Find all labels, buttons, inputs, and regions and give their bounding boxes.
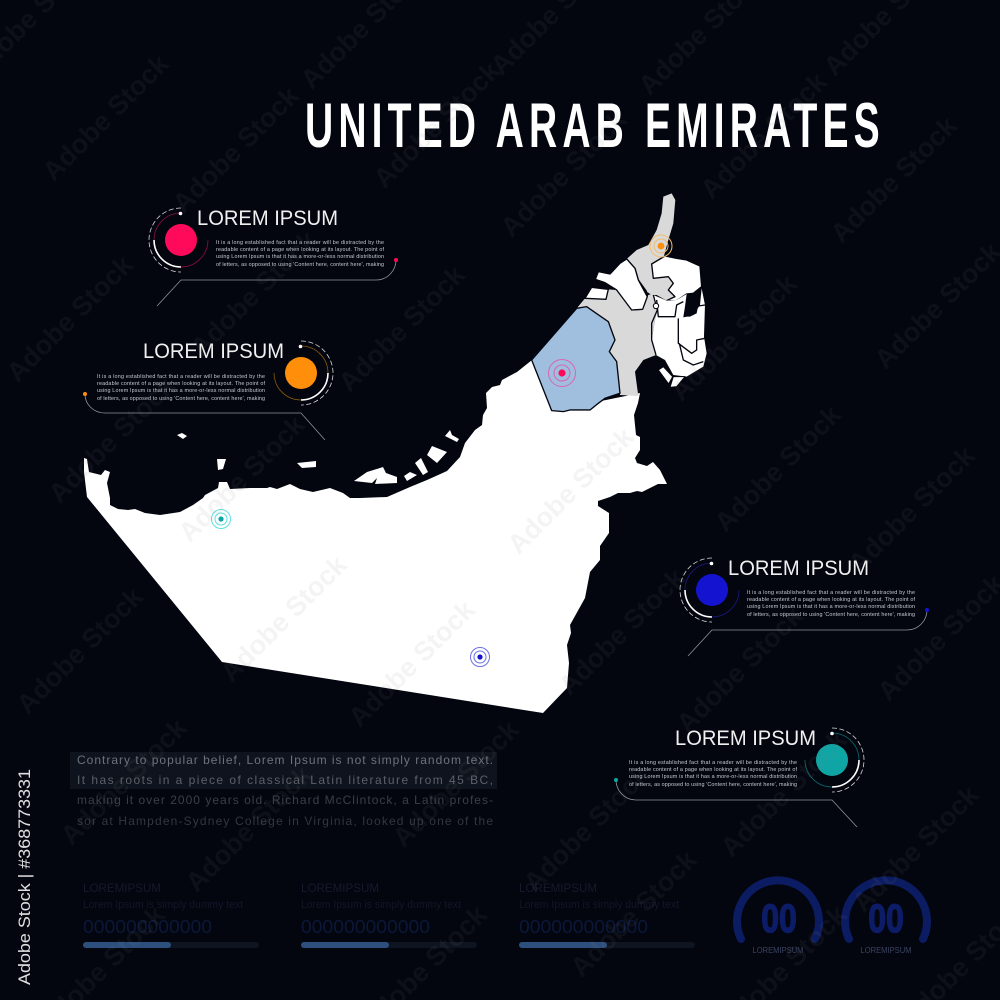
gauge 2: LOREMIPSUM [860,946,912,955]
stat card 1: 000000000000 [83,917,212,937]
body text: of letters, as opposed to using 'Content here, content here', making [216,262,384,268]
stat card 3 [519,881,695,948]
heading: LOREM IPSUM [675,727,816,750]
heading: LOREM IPSUM [197,207,338,230]
northern emirates [532,193,707,412]
watermark pattern: Adobe Stock [180,759,318,898]
map marker: pink [548,360,576,386]
watermark pattern: Adobe Stock [167,80,305,219]
watermark pattern: Adobe Stock [387,714,525,853]
watermark pattern: Adobe Stock [553,562,691,701]
watermark pattern: Adobe Stock [185,224,323,363]
body text: using Lorem Ipsum is that it has a more-or-less normal distribution [747,604,915,610]
body text: It is a long established fact that a reader will be distracted by the [747,590,915,596]
body text [747,590,916,618]
inland dark gap [683,293,698,317]
icon: pink ring badge [149,208,208,272]
watermark pattern: Adobe Stock [843,440,981,579]
body text: It is a long established fact that a reader will be distracted by the [216,240,384,246]
body text: readable content of a page when looking at its layout. The point of [629,767,798,773]
icon: teal ring badge [805,728,864,792]
islands [177,430,459,484]
body text [629,760,798,788]
stat card 2: 000000000000 [301,917,430,937]
callout: left orange [83,340,333,440]
vertical stock id: Adobe Stock | #368773331 [15,769,34,985]
leader line [85,394,325,440]
body text: using Lorem Ipsum is that it has a more-or-less normal distribution [629,774,797,780]
watermark pattern: Adobe Stock [55,712,193,851]
body text: of letters, as opposed to using 'Content here, content here', making [629,782,797,788]
mainland [84,360,667,713]
stat card 2: Lorem Ipsum is simply dummy text [301,899,461,911]
map of the United Arab Emirates [84,193,707,713]
watermark pattern: Adobe Stock [43,370,181,509]
paragraph: sor at Hampden-Sydney College in Virginia, looked up one of the [77,814,493,828]
heading: LOREM IPSUM [728,557,869,580]
watermark pattern: Adobe Stock [695,66,833,205]
watermark pattern: Adobe Stock [11,581,149,720]
leader line [616,780,857,827]
watermark pattern: Adobe Stock [709,399,847,538]
gauge 2 [845,880,927,955]
body text: readable content of a page when looking at its layout. The point of [97,381,266,387]
watermark pattern: Adobe Stock [518,759,656,898]
Sharjah region [577,289,657,396]
map marker: teal [212,510,230,528]
Fujairah south [652,288,707,377]
stat card 3: Lorem Ipsum is simply dummy text [519,899,679,911]
gauge 1: LOREMIPSUM [752,946,804,955]
watermark pattern: Adobe Stock [671,600,809,739]
watermark pattern: Adobe Stock [495,104,633,243]
body text: It is a long established fact that a reader will be distracted by the [97,374,265,380]
Ras Al Khaimah region [627,193,675,301]
icon: blue ring badge [680,558,739,622]
leader line [157,260,396,306]
watermark pattern: Adobe Stock [1,249,139,388]
gauge 2: 00 [868,896,904,941]
paragraph [70,752,497,828]
Ajman and Umm Al Quwain region [595,259,647,310]
heading: LOREM IPSUM [143,340,284,363]
Fujairah north [652,256,702,301]
callout: right blue [680,557,929,656]
icon: orange ring badge [274,341,333,405]
callout: lower right teal [614,727,864,827]
stat card 2 [301,881,477,948]
coastal enclaves [658,367,673,384]
stat card 3: 000000000000 [519,917,648,937]
watermark pattern: Adobe Stock [173,409,311,548]
watermark pattern: Adobe Stock [215,549,353,688]
body text: using Lorem Ipsum is that it has a more-or-less normal distribution [97,388,265,394]
watermark pattern: Adobe Stock [565,844,703,983]
paragraph: Contrary to popular belief, Lorem Ipsum is not simply random text. [77,753,493,767]
watermark pattern: Adobe Stock [333,259,471,398]
body text: readable content of a page when looking at its layout. The point of [216,247,384,253]
paragraph: making it over 2000 years old. Richard McClintock, a Latin profes- [77,793,493,807]
watermark pattern: Adobe Stock [715,724,853,863]
leader line [688,610,927,656]
map marker: blue [470,648,490,666]
title: UNITED ARAB EMIRATES [305,92,880,161]
watermark pattern: Adobe Stock [343,594,481,733]
gauge 1 [737,880,819,955]
Al Ain highlighted region [532,307,620,412]
stat card 2: LOREMIPSUM [301,881,379,895]
body text [216,240,384,268]
body text: of letters, as opposed to using 'Content here, content here', making [747,612,915,618]
stat card 1: LOREMIPSUM [83,881,161,895]
body text: using Lorem Ipsum is that it has a more-or-less normal distribution [216,254,384,260]
callout: top left pink [149,207,398,306]
stat card 1: Lorem Ipsum is simply dummy text [83,899,243,911]
stat card 1 [83,881,259,948]
watermark pattern: Adobe Stock [825,110,963,249]
stat card 3: LOREMIPSUM [519,881,597,895]
watermark pattern: Adobe Stock [665,268,803,407]
paragraph: It has roots in a piece of classical Latin literature from 45 BC, [77,773,493,787]
body text [97,374,266,402]
body text: readable content of a page when looking at its layout. The point of [747,597,916,603]
watermark pattern: Adobe Stock [368,55,506,194]
watermark pattern: Adobe Stock [37,48,175,187]
watermark pattern: Adobe Stock [502,421,640,560]
map marker: orange [650,235,672,257]
body text: of letters, as opposed to using 'Content here, content here', making [97,396,265,402]
watermark pattern: Adobe Stock [847,779,985,918]
gauge 1: 00 [761,896,797,941]
body text: It is a long established fact that a reader will be distracted by the [629,760,797,766]
